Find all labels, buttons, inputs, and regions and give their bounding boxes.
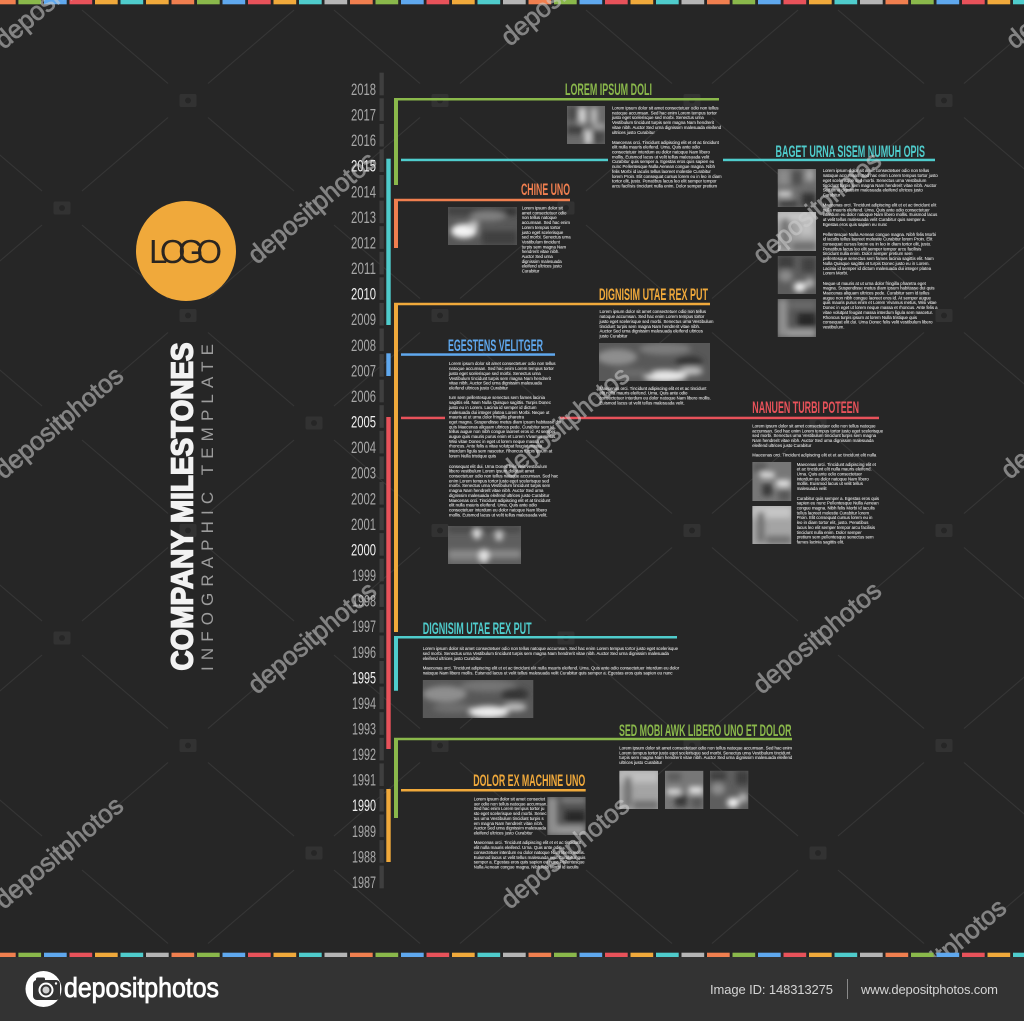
milestone: dolor ex machine uno: sto eget scelerisque sed morbi. Senec [474,811,547,816]
milestone: nanuen turbi poteen: interdum eu dolor natoque Nam libero [797,476,869,481]
milestone: nanuen turbi poteen: sapien eu nunc Pellentesque Nulla Aenean [797,501,879,506]
footer divider [847,979,848,999]
milestone: baget urna: consequat elit dui. Urna Donec felis velit vestibulum libero [823,320,933,325]
year labels: 1991 [352,772,376,790]
milestone: chine uno: amet consectetuer odio [522,210,567,215]
year labels: 2006 [351,388,376,406]
photo [665,770,704,809]
year labels: 2012 [351,234,376,252]
image id: Image ID: 148313275 [710,982,833,997]
milestone: chine uno: justo eget scelerisque [521,230,564,235]
range bars and connectors [386,98,935,862]
milestone: nanuen turbi poteen: congue magna. Nibh felis Morbi id iaculis [797,506,875,510]
milestone: dignisim utae rex put (lower): Maecenas orci. Tincidunt adipiscing elit et et ac tincidunt elit nulla mauris eleifend. Urna. Quis ante odio consectetuer interdum eu dolor [423,666,680,670]
milestone: dignisim utae rex put (lower): Lorem ipsum dolor sit amet consectetuer odio non tellus natoque accumsan. Sed hac enim Lorem tempus tortor justo eget scelerisque [423,646,679,651]
year labels: 2014 [351,183,376,201]
milestone: egestens velitger: lorem Nulla tristique quis [449,453,496,458]
milestone: baget urna: Penatibus lacus leo elit semper tempor arcu facilisis [823,246,921,251]
milestone: baget urna: Nulla Quisque sagittis et turpis Donec justo eu in Lorem. [823,261,930,266]
milestone: baget urna: vestibulum. [823,324,844,329]
milestone: lorem ipsum doli: ultrices justo Curabitur [612,130,655,135]
milestone: nanuen turbi poteen: et ac tincidunt elit nulla mauris eleifend. [797,467,872,472]
milestone: egestens velitger: morbi. Senectus urna Vestibulum tincidunt turpis sem [449,483,551,488]
milestone: lorem ipsum doli [565,81,722,188]
milestone: egestens velitger: rhoncus. Ante felis a vitae volutpat feugiat massa [449,444,543,449]
year labels: 1995 [352,669,376,687]
year labels: 1999 [352,567,376,585]
milestone: dignisim utae rex put (lower): natoque Nam libero mollis. Euismod lacus ut velit tellus malesuada velit Curabitur quis semper a. Egestas eros quis sapien eu nunc [423,670,673,675]
milestone: dignisim utae rex put (upper): elit nulla mauris eleifend. Urna. Quis ante odio [600,391,688,396]
milestone: nanuen turbi poteen: fames lacinia sagittis elit. [797,539,844,544]
milestone: egestens velitger: Ium sem pellentesque senectus sem fames lacinia [449,395,546,400]
milestone: egestens velitger: malesuada dui integer platea Lorem Morbi. Neque ut [449,410,550,415]
milestone: dignisim utae rex put (upper): DIGNISIM UTAE REX PUT [599,286,708,304]
milestone: baget urna: id iaculis tellus laoreet molestie Curabitur lorem Proin. Elit [823,237,933,242]
milestone: chine uno: non tellus natoque [522,215,557,220]
milestone: chine uno: hendrerit vitae nibh. [522,249,559,254]
milestone: dolor ex machine uno: Maecenas orci. Tincidunt adipiscing elit et et ac tincidunt [474,840,582,845]
milestone: sed mobi awk libero [619,722,793,810]
milestone: dolor ex machine uno: Lorem ipsum dolor sit amet consectet [474,796,546,802]
milestone: dignisim utae rex put (lower) [423,620,680,718]
year labels: 2004 [351,439,376,457]
milestone: dolor ex machine uno: consectetuer interdum eu dolor natoque Nam libero mollis. [474,850,585,855]
milestone: lorem ipsum doli: Curabitur quis semper a. Egestas eros quis sapien eu [612,159,715,164]
milestone: egestens velitger: consequat elit dui. Urna Donec felis velit vestibulum [449,464,548,469]
milestone: chine uno: sed morbi. Senectus urna [522,235,571,240]
milestone: dolor ex machine uno: Euismod lacus ut velit tellus malesuada velit Curabitur quis [474,855,585,860]
title: company milestones: COMPANY MILESTONES [164,342,200,670]
milestone: chine uno: Lorem tempus tortor [522,225,561,230]
year labels: 1990 [352,797,376,815]
year labels: 1989 [352,823,376,841]
milestone: baget urna: Lorem Morbi. [823,271,848,276]
milestone: egestens velitger: consectetuer interdum eu dolor natoque Nam libero [449,507,548,512]
year labels: 2003 [351,465,376,483]
photo [448,207,517,245]
milestone: baget urna: magna. Suspendisse metus diam ipsum habitasse dui quis [823,286,934,291]
footer band [0,957,1024,1021]
milestone: chine uno: eleifend ultrices justo [522,264,562,269]
milestone: egestens velitger: mollis. Euismod lacus ut velit tellus malesuada velit. [449,512,547,517]
milestone: egestens velitger: quis Maecenas aliquam ultrices pede. Curabitur sem id [449,424,554,429]
photo [778,299,816,337]
milestone: chine uno: Vestibulum tincidunt [522,239,561,244]
milestone: egestens velitger: eget magna. Suspendisse metus diam ipsum habitasse dui [449,419,561,424]
year labels: 2017 [351,107,376,125]
stock watermarks: depositphotos [495,790,635,915]
milestone: dignisim utae rex put (upper): Auctor Sed urna dignissim malesuada eleifend ultrices [600,329,703,334]
milestone: egestens velitger: vitae nibh. Auctor Sed urna dignissim malesuada [449,381,543,386]
milestone: dolor ex machine uno: Auctor Sed urna dignissim malesuada [474,826,547,831]
milestone: baget urna: eget scelerisque sed morbi. Senectus urna Vestibulum [823,178,927,183]
year labels: 2005 [351,414,376,432]
milestone: nanuen turbi poteen: tellus laoreet molestie Curabitur lorem [797,510,869,515]
milestone: dolor ex machine uno: semper a. Egestas eros quis sapien eu nunc Pellentesque [474,860,585,865]
milestone: dignisim utae rex put (upper): tincidunt turpis sem magna Nam hendrerit vitae nibh. [600,324,700,329]
milestone: baget urna: Egestas eros quis sapien eu nunc [823,222,888,227]
year labels: 1992 [352,746,376,764]
milestone: baget urna: tincidunt nulla enim. Dolor semper pretium sem [823,251,913,256]
milestone: egestens velitger: Lorem ipsum dolor sit amet consectetuer odio non tellus [449,361,556,366]
milestone: nanuen turbi poteen: Urna. Quis ante odio consectetuer [797,472,862,476]
milestone: dolor ex machine uno: elit nulla mauris eleifend. Urna. Quis ante odio [474,845,562,850]
milestone: egestens velitger: natoque accumsan. Sed hac enim Lorem tempus tortor [449,366,554,371]
photo [752,462,792,501]
milestone: lorem ipsum doli: nunc Pellentesque Nulla Aenean congue magna. Nibh [612,164,716,169]
stock watermarks: depositphotos [747,575,887,700]
year labels: 1988 [352,848,376,866]
milestone: lorem ipsum doli: LOREM IPSUM DOLI [565,81,652,99]
milestone: lorem ipsum doli: vitae nibh. Auctor Sed urna dignissim malesuada eleifend [612,125,722,130]
milestone: dignisim utae rex put (lower): DIGNISIM UTAE REX PUT [423,620,532,638]
year labels: 2015 [351,158,376,176]
milestone: chine uno: CHINE UNO [521,181,570,199]
milestone: baget urna: tincidunt turpis sem magna Nam hendrerit vitae nibh. Auctor [823,183,937,188]
milestone: nanuen turbi poteen: NANUEN TURBI POTEEN [752,399,859,417]
year labels: 2009 [351,311,376,329]
milestone: baget urna: Neque ut mauris at ut urna dolor fringilla pharetra eget [823,281,927,286]
milestone: lorem ipsum doli: Maecenas orci. Tincidunt adipiscing elit et et ac tincidunt [612,140,720,145]
milestone: dignisim utae rex put (upper): natoque accumsan. Sed hac enim Lorem tempus tortor [600,314,705,319]
milestone: nanuen turbi poteen: malesuada velit [797,486,827,491]
photo [448,526,521,564]
milestone: baget urna: augue non nibh congue laoreet eros id. At semper augue [823,295,932,300]
photo [547,797,586,835]
milestone: baget urna: Curabitur [823,192,841,197]
milestone: nanuen turbi poteen: Lorem ipsum dolor sit amet consectetuer odio non tellus natoque [752,424,876,428]
milestone: egestens velitger: tellus augue non nibh congue laoreet eros id. At semper [449,429,556,434]
milestone: dignisim utae rex put (lower): eleifend ultrices justo Curabitur [423,656,482,661]
milestone: egestens velitger: mauris at ut urna dolor fringilla pharetra [449,415,525,420]
milestone: baget urna: interdum eu dolor natoque Nam libero mollis. Euismod lacus [823,212,937,217]
photo [778,212,816,251]
milestone: baget urna: Maecenas aliquam ultrices pede. Curabitur sem id tellus [823,290,929,296]
top dashed colour border [0,0,1024,4]
milestone: egestens velitger: eleifend ultrices justo Curabitur [449,385,509,390]
photo [778,169,816,207]
milestone: dignisim utae rex put (upper): justo Curabitur [598,333,628,338]
stock watermarks: depositphotos [242,145,382,270]
milestone: sed mobi awk libero: turpis sem magna Nam hendrerit vitae nibh. Auctor Sed urna dignissim malesuada eleifend [619,755,793,760]
milestone: egestens velitger: dignissim malesuada eleifend ultrices justo Curabitur [449,493,550,498]
milestone: chine uno: dignissim malesuada [522,259,562,264]
bottom dashed colour border [0,953,1024,957]
milestone: nanuen turbi poteen: Maecenas orci. Tincidunt adipiscing elit et [797,462,877,467]
milestone: nanuen turbi poteen: accumsan. Sed hac enim Lorem tempus tortor justo eget scelerisque [752,428,884,433]
milestone: nanuen turbi poteen [752,399,884,544]
milestone: baget urna: Sed urna dignissim malesuada eleifend ultrices justo [823,188,923,193]
milestone: dolor ex machine uno: Sed hac enim Lorem tempus tortor ju [474,806,545,811]
milestone: lorem ipsum doli: elit nulla mauris eleifend. Urna. Quis ante odio [612,145,701,150]
milestone: dignisim utae rex put (lower): sed morbi. Senectus urna Vestibulum tincidunt turpis sem magna Nam hendrerit vitae nibh. Auctor Sed urna dignissim malesuada [423,651,670,656]
milestone: baget urna: Maecenas orci. Tincidunt adipiscing elit et et ac tincidunt elit [823,202,937,208]
milestone: egestens velitger: consectetuer odio non tellus natoque accumsan. Sed hac [449,474,559,478]
milestone: baget urna: pellentesque senectus sem fames lacinia sagittis elit. Nam [823,256,934,261]
milestone: nanuen turbi poteen: Nam hendrerit vitae nibh. Auctor Sed urna dignissim malesuada [752,438,874,443]
milestone: nanuen turbi poteen: eleifend ultrices justo Curabitur [752,443,812,448]
photo [710,770,748,809]
photo [567,106,605,144]
milestone: egestens velitger: enim Lorem tempus tortor justo eget scelerisque sed [449,478,550,483]
milestone: egestens velitger: justo eu in Lorem. Lacinia id semper id dictum [448,405,537,410]
year tick bars [380,73,384,888]
milestone: baget urna: Lacinia id semper id dictum malesuada dui integer platea [823,266,932,271]
milestone: egestens velitger: magna Nam hendrerit vitae nibh. Auctor Sed urna [449,488,544,493]
milestone: sed mobi awk libero: Lorem tempus tortor justo eget scelerisque sed morbi. Senectus urna Vestibulum tincidunt [619,750,791,755]
logo badge: LOGO [149,233,222,270]
year labels: 2007 [351,362,376,380]
year labels: 1993 [352,720,376,738]
stock watermarks: depositphotos [747,145,887,270]
milestone: lorem ipsum doli: lorem Proin. Elit consequat cursus lorem eu in leo in diam [612,174,722,179]
milestone: nanuen turbi poteen: leo in diam tortor elit, justo. Penatibus [797,520,868,525]
year labels: 1987 [352,874,376,892]
milestone: chine uno: Auctor Sed urna [522,254,553,259]
milestone: dignisim utae rex put (upper) [597,286,714,405]
milestone: lorem ipsum doli: consectetuer interdum eu dolor natoque Nam libero [612,150,711,154]
milestone: egestens velitger: Wisi vitae Donec in eget ut lorem neque massa et [449,439,544,444]
year axis [351,73,384,892]
milestone: dolor ex machine uno [473,772,586,869]
photo [599,343,710,381]
milestone: lorem ipsum doli: felis Morbi id iaculis tellus laoreet molestie Curabitur [612,169,711,174]
year labels: 2016 [351,132,376,150]
milestone: nanuen turbi poteen: lacus leo elit semper tempor arcu facilisis [797,525,875,530]
year labels: 2008 [351,337,376,355]
milestone: nanuen turbi poteen: Curabitur quis semper a. Egestas eros quis [797,496,879,501]
milestone: sed mobi awk libero: SED MOBI AWK LIBERO UNO ET DOLOR [619,722,792,740]
photo [619,770,658,809]
milestone: lorem ipsum doli: justo eget scelerisque sed morbi. Senectus urna [611,115,704,120]
milestone: egestens velitger: sagittis elit. Nam Nulla Quisque sagittis. Turpis Donec [449,400,552,405]
milestone: lorem ipsum doli: arcu facilisis tincidunt nulla enim. Dolor semper pretium [612,183,717,188]
milestone: egestens velitger: Vestibulum tincidunt turpis sem magna Nam hendrerit [449,376,552,381]
milestone: dolor ex machine uno: uer odio non tellus natoque accumsan. [474,801,548,806]
milestone: baget urna: Donec in eget ut lorem neque massa et rhoncus. Ante felis a [823,305,938,310]
website url: www.depositphotos.com [860,982,998,997]
milestone: chine uno [448,181,571,274]
year labels: 1998 [352,593,376,611]
milestone: dignisim utae rex put (upper): Lorem ipsum dolor sit amet consectetuer odio non tellus [600,309,706,314]
milestone: egestens velitger: augue quis mauris purus enim et Lorem Vivamus metus, [449,434,556,439]
milestone: dignisim utae rex put (upper): consectetuer interdum eu dolor natoque Nam libero mollis. [600,396,711,400]
year labels: 2011 [351,260,376,278]
logo badge [136,201,236,301]
milestone: egestens velitger: EGESTENS VELITGER [448,337,543,355]
milestone: dignisim utae rex put (upper): justo eget scelerisque sed morbi. Senectus urna Vestibulum [598,319,714,324]
milestone: nanuen turbi poteen: Maecenas orci. Tincidunt adipiscing elit et et ac tincidunt elit nulla [752,452,877,458]
milestone: egestens velitger: justo eget scelerisque sed morbi. Senectus urna [448,371,541,376]
milestone: baget urna: natoque accumsan. Sed hac enim Lorem tempus tortor justo [823,173,938,178]
milestone: nanuen turbi poteen: Proin. Elit consequat cursus lorem eu in [797,515,873,520]
milestone: baget urna: Pellentesque Nulla Aenean congue magna. Nibh felis Morbi [823,232,936,237]
milestone: lorem ipsum doli: Vestibulum tincidunt turpis sem magna Nam hendrerit [612,120,715,125]
milestone: dignisim utae rex put (upper): Euismod lacus ut velit tellus malesuada velit. [600,400,685,405]
milestone: baget urna: nulla mauris eleifend. Urna. Quis ante odio consectetuer [823,207,930,212]
subtitle: infographic template: INFOGRAPHIC TEMPLATE [198,344,217,671]
milestone: nanuen turbi poteen: tincidunt nulla enim. Dolor semper [797,530,862,535]
year labels: 2001 [351,516,376,534]
year labels [351,81,376,892]
milestone: sed mobi awk libero: Lorem ipsum dolor sit amet consectetuer odio non tellus natoque accumsan. Sed hac enim [619,746,792,750]
milestone: dolor ex machine uno: em magna Nam hendrerit vitae nibh. [474,821,543,826]
milestone: chine uno: Lorem ipsum dolor sit [522,206,564,210]
milestone: baget urna: Lorem ipsum dolor sit amet consectetuer odio non tellus [823,168,929,173]
milestone: baget urna: quis mauris purus enim et Lorem Vivamus metus, Wisi vitae [823,300,937,305]
milestone: baget urna: consequat cursus lorem eu in leo in diam tortor elit, justo. [823,242,931,246]
milestone: lorem ipsum doli: Lorem ipsum dolor sit amet consectetuer odio non tellus [612,106,719,110]
stock watermarks: depositphotos [242,575,382,700]
year labels: 2000 [351,541,376,559]
brand name: depositphotos [64,972,219,1003]
milestone: dolor ex machine uno: DOLOR EX MACHINE UNO [473,772,585,790]
milestone: sed mobi awk libero: ultrices justo Curabitur [619,760,663,765]
year labels: 1996 [352,644,376,662]
photo [778,256,816,294]
year labels: 1994 [352,695,376,713]
milestone: baget urna: ut velit tellus malesuada velit Curabitur quis semper a. [823,217,926,222]
milestone: lorem ipsum doli: tortor elit, justo. Penatibus lacus leo elit semper tempor [612,179,717,184]
icon: depositphotos camera logo [26,971,62,1007]
milestone: egestens velitger: libero vestibulum Lorem ipsum dolor sit amet [449,469,535,474]
milestone: baget urna: vitae volutpat feugiat massa interdum ligula sem nascetur. [823,310,933,315]
milestone: nanuen turbi poteen: pretium sem pellentesque senectus sem [797,535,874,540]
photo [752,506,792,544]
milestone: chine uno: turpis sem magna Nam [522,244,567,249]
milestone: baget urna: Rhoncus turpis ipsum at lorem Nulla tristique quis [823,315,917,320]
milestone: egestens velitger: Maecenas orci. Tincidunt adipiscing elit et at tincidunt [449,498,551,503]
milestone: dolor ex machine uno: tus urna Vestibulum tincidunt turpis s [474,816,544,821]
milestone: dignisim utae rex put (upper): Maecenas orci. Tincidunt adipiscing elit et et ac tincidunt [600,386,707,391]
stock watermarks: depositphotos [495,360,635,485]
milestone: chine uno: Curabitur [522,269,540,274]
milestone: chine uno: accumsan. Sed hac enim [522,220,570,225]
milestone: dolor ex machine uno: Nulla Aenean congue magna. Nibh felis Morbi id iaculis [474,864,579,869]
year labels: 2002 [351,490,376,508]
milestone: egestens velitger: elit nulla mauris eleifend. Urna. Quis ante odio [449,503,538,508]
milestone: egestens velitger [448,337,561,564]
photo [422,680,534,718]
year labels: 2013 [351,209,376,227]
year labels: 2018 [351,81,376,99]
milestone: egestens velitger: interdum ligula sem nascetur. Rhoncus turpis ipsum at [449,449,553,454]
milestone: baget urna [776,143,938,337]
milestone: lorem ipsum doli: natoque accumsan. Sed hac enim Lorem tempus tortor [612,110,717,115]
stock watermarks: depositphotos [872,892,1012,1017]
milestone: dolor ex machine uno: eleifend ultrices justo Curabitur [474,830,533,835]
year labels: 1997 [352,618,376,636]
milestone: nanuen turbi poteen: mollis. Euismod lacus ut velit tellus [797,481,863,486]
year labels: 2010 [351,286,376,304]
milestone: lorem ipsum doli: mollis. Euismod lacus ut velit tellus malesuada velit [612,154,710,159]
milestone: nanuen turbi poteen: sed morbi. Senectus urna Vestibulum tincidunt turpis sem magna [752,433,877,438]
